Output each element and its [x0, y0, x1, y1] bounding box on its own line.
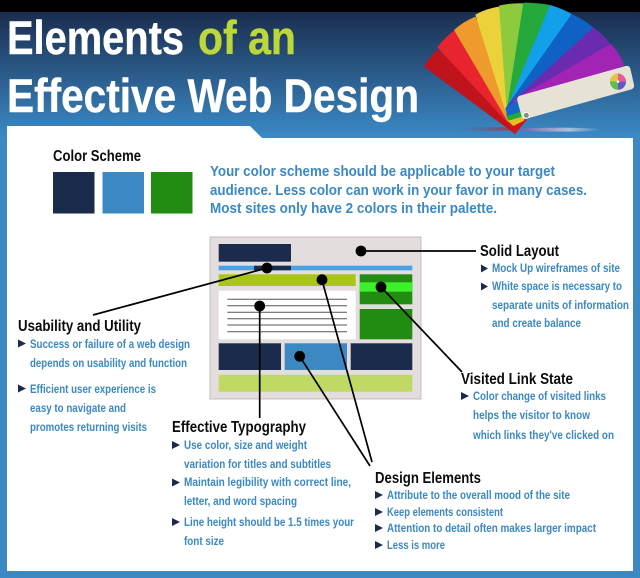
icon: colour swatch fan — [424, 3, 634, 134]
callout lines and dots — [93, 246, 476, 466]
heading: visited link state: Visited Link State — [461, 371, 573, 388]
heading: usability and utility: Usability and Utility — [18, 318, 141, 335]
panel: design elements — [375, 470, 596, 552]
heading: solid layout: Solid Layout — [480, 243, 560, 260]
swatch: green — [151, 172, 192, 214]
white content panel — [7, 126, 633, 571]
bullet list: usability: easy to navigate and — [30, 401, 126, 415]
panel: solid layout — [480, 243, 629, 330]
text: colour scheme description: Your color scheme should be applicable to your target — [210, 163, 555, 180]
swatch: blue — [102, 172, 144, 214]
bullet list: visited links: helps the visitor to know — [473, 408, 591, 422]
bullet list: typography: letter, and word spacing — [184, 494, 297, 508]
bullet list: solid layout: and create balance — [492, 316, 581, 330]
bullet list: solid layout — [481, 261, 629, 330]
bullet list: design elements: Attribute to the overall mood of the site — [387, 488, 570, 502]
title: of an — [198, 11, 296, 64]
text: colour scheme description: audience. Less color can work in your favor in many cases. — [210, 182, 587, 199]
panel: visited link state — [461, 371, 614, 442]
heading: effective typography: Effective Typography — [172, 419, 306, 436]
bullet list: visited links: which links they've clicked on — [472, 428, 614, 442]
bullet list: typography: font size — [184, 534, 224, 548]
bullet list: usability: depends on usability and function — [30, 356, 187, 370]
swatch: navy — [53, 172, 94, 214]
bullet list: typography: Use color, size and weight — [184, 438, 307, 452]
text: colour scheme description — [210, 163, 587, 217]
panel: effective typography — [172, 419, 354, 548]
bullet list: usability: promotes returning visits — [30, 420, 147, 434]
bullet list: typography: variation for titles and subtitles — [184, 457, 331, 471]
panel: usability and utility — [18, 318, 190, 434]
bullet list: visited links: Color change of visited links — [473, 389, 606, 403]
bullet list: typography: Line height should be 1.5 times your — [184, 515, 354, 529]
heading: design elements: Design Elements — [375, 470, 481, 487]
section: colour scheme — [53, 148, 587, 217]
bullet list: usability: Success or failure of a web design — [30, 337, 190, 351]
bullet list: typography — [172, 438, 354, 548]
web page wireframe diagram — [210, 237, 421, 399]
bullet list: design elements: Keep elements consistent — [387, 505, 503, 519]
title: Effective Web Design — [7, 69, 419, 122]
heading: colour scheme: Color Scheme — [53, 148, 141, 165]
bullet list: design elements: Attention to detail often makes larger impact — [387, 521, 596, 535]
bullet list: visited links — [461, 389, 614, 442]
title — [7, 11, 419, 122]
title: Elements — [7, 11, 184, 64]
bullet list: design elements — [375, 488, 596, 552]
bullet list: typography: Maintain legibility with correct line, — [184, 475, 351, 489]
text: colour scheme description: Most sites only have 2 colors in their palette. — [210, 200, 497, 217]
bullet list: usability: Efficient user experience is — [30, 382, 156, 396]
bullet list: usability — [18, 337, 190, 434]
bullet list: design elements: Less is more — [387, 538, 445, 552]
